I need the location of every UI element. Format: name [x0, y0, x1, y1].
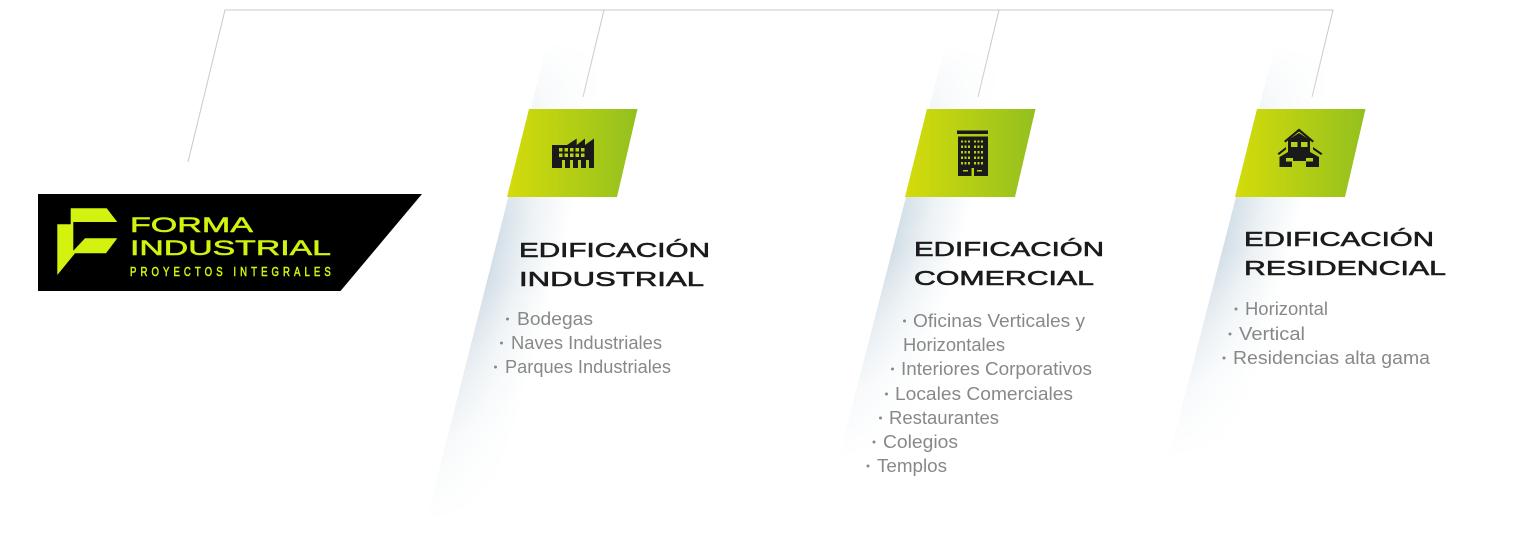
list: Colegios: [883, 432, 958, 452]
heading: COMERCIAL: [914, 268, 1094, 290]
list: Vertical: [1239, 324, 1305, 344]
list: Oficinas Verticales y: [913, 311, 1085, 331]
heading: EDIFICACIÓN: [914, 238, 1104, 261]
list: [866, 311, 1092, 476]
list: [1222, 299, 1431, 368]
logo tagline: PROYECTOS INTEGRALES: [130, 266, 331, 279]
panel: edificación industrial: [446, 90, 708, 442]
list: Locales Comerciales: [895, 384, 1073, 404]
green parallelogram: [507, 109, 638, 197]
list: Parques Industriales: [505, 357, 671, 377]
fading band: [1186, 88, 1314, 389]
heading: [1244, 228, 1446, 280]
fading band: [856, 88, 980, 389]
heading: EDIFICACIÓN: [519, 239, 710, 262]
list: Residencias alta gama: [1233, 348, 1431, 368]
list: [494, 309, 671, 377]
logo mark: F: [57, 208, 117, 275]
heading: EDIFICACIÓN: [1244, 228, 1434, 251]
list: Horizontales: [903, 335, 1005, 355]
list: Horizontal: [1245, 299, 1328, 319]
heading: [914, 238, 1104, 290]
icon: house: [1278, 128, 1322, 167]
list: Restaurantes: [889, 408, 999, 428]
list: Bodegas: [517, 309, 593, 329]
panel: edificación residencial: [1186, 88, 1446, 389]
fading band: [446, 90, 585, 442]
green parallelogram: [1235, 109, 1366, 197]
heading: RESIDENCIAL: [1244, 258, 1446, 280]
icon: office building: [957, 130, 988, 176]
connector lines: [188, 10, 1333, 162]
heading: [519, 239, 710, 291]
list: Templos: [877, 456, 947, 476]
list: Interiores Corporativos: [901, 359, 1092, 379]
green parallelogram: [905, 109, 1036, 197]
logo name: INDUSTRIAL: INDUSTRIAL: [130, 237, 331, 260]
heading: INDUSTRIAL: [519, 269, 704, 291]
logo name: FORMA: FORMA: [130, 214, 253, 237]
panel: edificación comercial: [856, 88, 1102, 476]
icon: factory: [552, 138, 594, 168]
logo banner: [38, 194, 422, 291]
list: Naves Industriales: [511, 333, 662, 353]
